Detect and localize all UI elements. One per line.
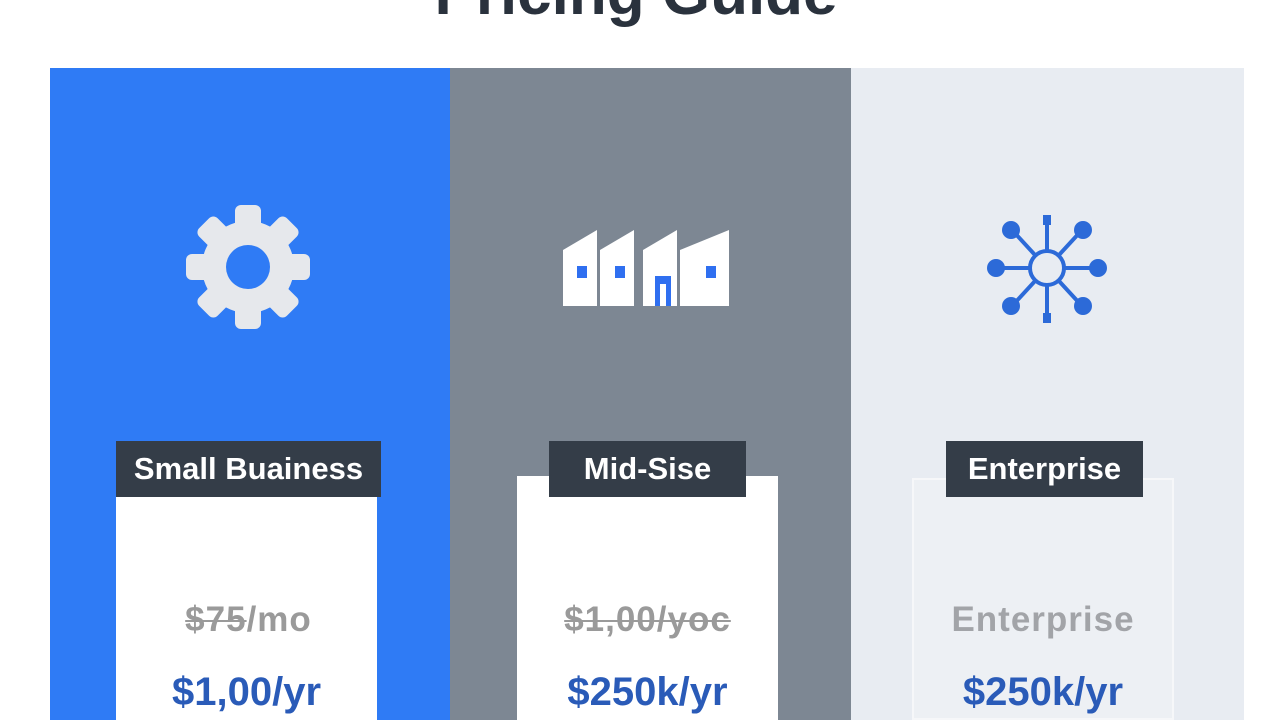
label: enterprise bbox=[946, 441, 1143, 497]
new price: enterprise: $250k/yr bbox=[963, 670, 1123, 714]
panel: small business bbox=[50, 68, 450, 720]
old price: small: $75/mo bbox=[185, 600, 312, 639]
card: enterprise bbox=[912, 478, 1174, 720]
label: small business bbox=[116, 441, 381, 497]
old price: mid: $1,00/yoc bbox=[564, 600, 731, 639]
icon: network bbox=[987, 215, 1107, 323]
label: small business: Small Buainess bbox=[134, 451, 363, 486]
panel: mid-size bbox=[450, 68, 851, 720]
new price: mid: $250k/yr bbox=[567, 670, 728, 714]
card: small business bbox=[116, 497, 377, 720]
label: mid-size: Mid-Sise bbox=[584, 451, 711, 486]
label: mid-size bbox=[549, 441, 746, 497]
new price: small: $1,00/yr bbox=[172, 670, 321, 714]
icon: buildings bbox=[563, 230, 729, 306]
icon: gear bbox=[186, 205, 310, 329]
old price: enterprise: Enterprise bbox=[951, 600, 1135, 639]
label: enterprise: Enterprise bbox=[968, 451, 1121, 486]
card: mid-size bbox=[517, 476, 778, 720]
panel: enterprise bbox=[851, 68, 1244, 720]
